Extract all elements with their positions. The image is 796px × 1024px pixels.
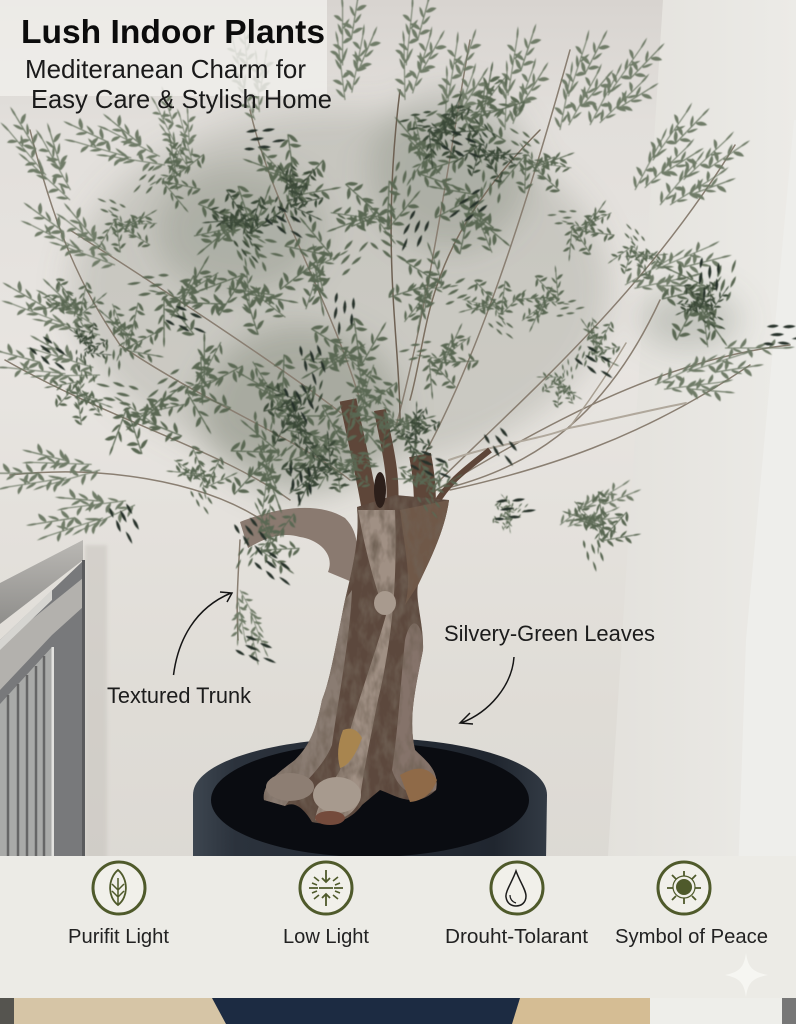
feature: symbol of peace [615,862,768,948]
title: Lush Indoor Plants [21,13,325,50]
bottom feature panel [0,856,796,998]
foliage: inner green clusters [30,49,746,588]
icon: water drop [491,862,543,914]
foliage soft mass [70,90,740,495]
foliage: deep shaded clusters [63,83,740,517]
textured trunk [240,400,490,825]
thin branches [5,40,790,640]
foliage: dark leaves [28,127,796,672]
foliage: grey-green outer sprays [0,0,795,672]
feature: drought tolerant: Drouht-Tolarant [445,926,588,948]
feature: low light [283,862,369,948]
subtitle [25,54,332,114]
icon: low light sun [300,862,352,914]
subtitle: Mediteranean Charm for [25,54,306,84]
upper limbs [348,400,490,520]
callout: textured trunk: Textured Trunk [107,683,252,708]
icon: leaf [93,862,145,914]
callout: silvery-green leaves: Silvery-Green Leaves [444,621,655,646]
olive foliage [0,0,796,672]
sparkle mark [725,953,768,997]
floor and lower pot [0,998,796,1024]
feature: purifit light: Purifit Light [68,926,169,948]
feature: drought tolerant [445,862,588,948]
subtitle: Easy Care & Stylish Home [31,84,332,114]
icon: sun [658,862,710,914]
feature: purifit light [68,862,169,948]
callout: textured trunk [107,592,252,708]
feature: symbol of peace: Symbol of Peace [615,926,768,948]
callout: silvery-green leaves [444,621,655,724]
title panel [0,0,327,96]
balcony railing [0,540,85,856]
feature: low light: Low Light [283,926,369,948]
black planter pot [193,738,547,860]
